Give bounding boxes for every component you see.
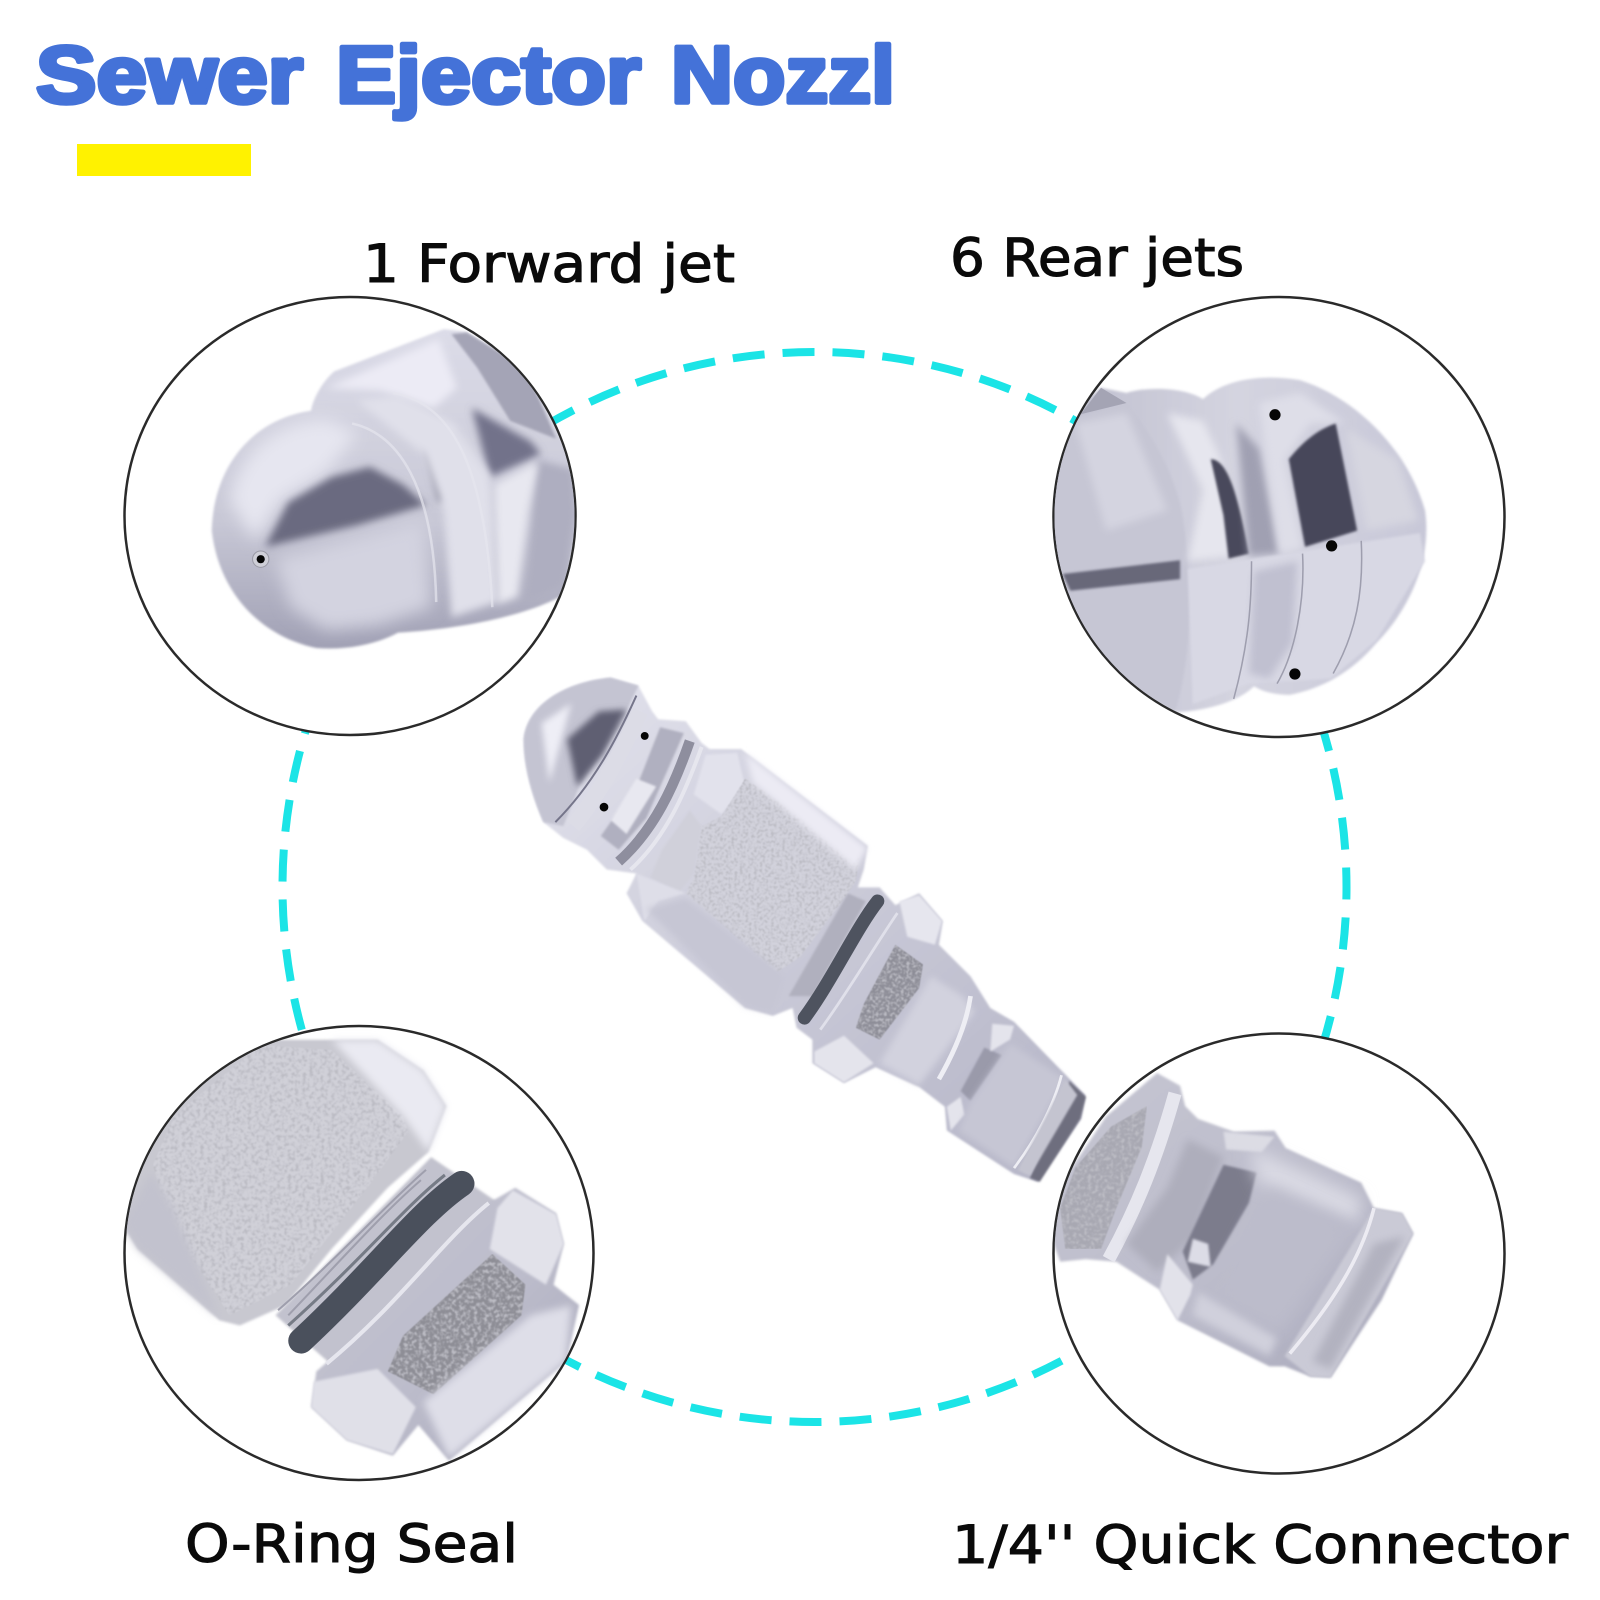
title <box>36 30 895 120</box>
title: Sewer <box>36 30 303 120</box>
dashed connecting ring <box>282 352 1346 1422</box>
detail circle: O-ring seal <box>122 1026 593 1480</box>
central nozzle product image <box>524 678 1086 1182</box>
label: 1/4'' Quick Connector: 1/4'' Quick Connector <box>952 1515 1568 1576</box>
label: 6 Rear jets: 6 Rear jets <box>950 228 1244 289</box>
title: Nozzl <box>671 30 895 120</box>
detail circle: quick connector <box>1050 1034 1504 1474</box>
title: Ejector <box>336 30 641 120</box>
label: 1 Forward jet: 1 Forward jet <box>363 234 735 295</box>
detail circle: rear jets <box>1045 297 1504 737</box>
label: O-Ring Seal: O-Ring Seal <box>185 1514 518 1575</box>
detail circle: forward jet <box>124 297 579 735</box>
yellow accent bar <box>77 144 251 176</box>
